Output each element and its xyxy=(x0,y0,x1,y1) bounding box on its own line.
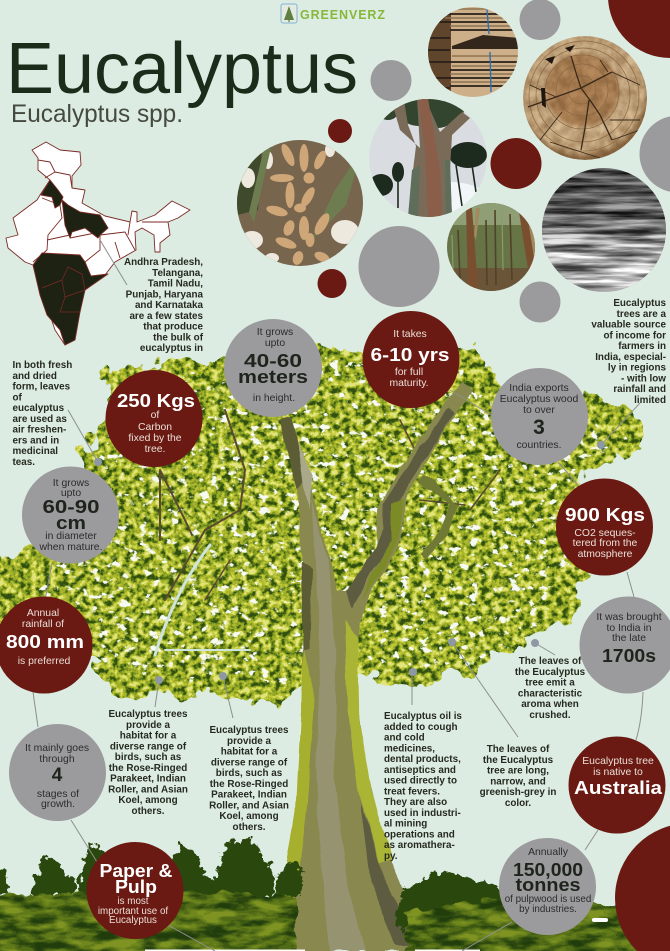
text: producing states: are a few states xyxy=(129,311,204,322)
stat: maturity xyxy=(362,311,460,408)
text: income source: limited xyxy=(634,395,666,406)
stat: diameter: 60-90 xyxy=(42,496,100,517)
text: income source: India, especial- xyxy=(595,352,666,363)
stat: height: in height. xyxy=(253,393,295,404)
background bushes xyxy=(0,838,505,930)
pale highlight upper trunk xyxy=(298,440,312,510)
green strip on right branch xyxy=(362,500,402,600)
stat: paper and pulp: Eucalyptus xyxy=(109,915,157,926)
text: bird habitat 1: birds, such as xyxy=(115,752,182,763)
text: bird habitat 1: the Rose-Ringed xyxy=(109,763,187,774)
stat: rainfall: Annual xyxy=(27,608,59,619)
stat: growth stages: It mainly goes xyxy=(25,743,89,754)
text: bird habitat 2: birds, such as xyxy=(216,768,283,779)
stat: paper and pulp xyxy=(86,842,184,939)
text: leaf shape: tree are long, xyxy=(487,766,549,776)
text: leaf aroma: characteristic xyxy=(518,688,583,699)
text: income source: valuable source xyxy=(591,320,666,330)
stat: rainfall: 800 mm xyxy=(6,632,84,652)
stat: growth stages: 4 xyxy=(52,765,63,786)
text: bird habitat 2: Eucalyptus trees xyxy=(209,725,289,736)
stat: diameter: when mature. xyxy=(39,542,102,553)
stat: exports: countries. xyxy=(516,440,562,451)
text: leaf aroma: the Eucalyptus xyxy=(515,667,586,678)
text: leaves used: of xyxy=(12,392,23,403)
stat: CO2: CO2 seques- xyxy=(574,528,636,539)
text: leaf shape: color. xyxy=(505,798,531,809)
text: bird habitat 2: Parakeet, Indian xyxy=(211,790,287,800)
text: leaves used: teas. xyxy=(12,457,35,468)
stat: brought to India: the late xyxy=(612,633,646,644)
text: leaves used: In both fresh xyxy=(12,360,72,371)
dark lower strip xyxy=(360,800,420,945)
stat: diameter: It grows xyxy=(53,478,89,489)
logo text: GREENVERZ xyxy=(300,8,385,22)
text: eucalyptus oil: medicines, xyxy=(384,743,435,754)
stat: pulpwood: by industries. xyxy=(519,904,577,915)
photo: bark texture xyxy=(540,165,670,295)
text: eucalyptus oil: and cold xyxy=(384,732,425,744)
text: bird habitat 1: habitat for a xyxy=(120,730,177,742)
bottom edge highlights xyxy=(145,918,608,951)
text: bird habitat 1: Eucalyptus trees xyxy=(108,709,188,720)
dark strip upper trunk xyxy=(278,415,312,650)
text: bird habitat 1: diverse range of xyxy=(110,741,187,752)
stat: native to Australia xyxy=(568,736,666,834)
text: leaf aroma: The leaves of xyxy=(519,656,582,667)
stat: height: meters xyxy=(238,366,308,387)
text: leaf aroma: aroma when xyxy=(521,699,579,710)
photo: wood cross section xyxy=(523,36,647,160)
stat: exports xyxy=(491,368,588,465)
stat: CO2: atmosphere xyxy=(578,549,633,560)
text: eucalyptus oil: al mining xyxy=(384,818,427,830)
stat: paper and pulp: important use of xyxy=(98,906,168,917)
gaps of sky in the foliage xyxy=(40,350,630,680)
stat: height: 40-60 xyxy=(244,350,302,371)
stat: growth stages: stages of xyxy=(37,789,79,800)
text: eucalyptus oil: operations and xyxy=(384,829,455,840)
text: bird habitat 2: provide a xyxy=(227,736,271,747)
text: leaves used: ers and in xyxy=(12,435,59,446)
stat: paper and pulp: Paper & xyxy=(100,860,172,881)
stat: maturity: maturity. xyxy=(389,378,429,389)
text: producing states: Punjab, Haryana xyxy=(126,289,203,300)
stat: diameter: cm xyxy=(56,512,86,533)
logo xyxy=(281,4,385,23)
text: leaves used: eucalyptus xyxy=(12,403,65,414)
stat: native to Australia: is native to xyxy=(593,767,643,778)
India outline xyxy=(6,142,190,345)
text: leaves used: are used as xyxy=(12,414,67,425)
text: eucalyptus oil: used directly to xyxy=(384,776,457,786)
stat: exports: India exports xyxy=(509,383,569,394)
text: producing states: Andhra Pradesh, xyxy=(124,257,203,268)
text: income source: - with low xyxy=(621,373,666,384)
inner dark state borders xyxy=(42,267,85,312)
text: bird habitat 2: habitat for a xyxy=(221,746,278,758)
text: leaves used: air freshen- xyxy=(12,424,66,436)
text: leaf aroma: crushed. xyxy=(529,710,571,721)
text: income source: Eucalyptus xyxy=(613,298,667,309)
stat: pulpwood: of pulpwood is used xyxy=(505,894,591,905)
text: bird habitat 2: diverse range of xyxy=(211,757,288,768)
text: bird habitat 1: provide a xyxy=(126,720,170,731)
producing states in dark xyxy=(33,180,108,345)
stat: rainfall xyxy=(0,596,92,694)
stat: paper and pulp: Pulp xyxy=(115,876,157,897)
text: income source: ly in regions xyxy=(608,362,667,374)
decorative circles xyxy=(318,0,670,322)
pale bark strip xyxy=(312,500,366,951)
text: leaf shape: narrow, and xyxy=(490,776,546,787)
stat: pulpwood: 150,000 xyxy=(513,859,583,880)
text: bird habitat 2: the Rose-Ringed xyxy=(210,779,288,790)
text: eucalyptus oil: antiseptics and xyxy=(384,765,456,776)
text: producing states: that produce xyxy=(143,322,203,332)
text: leaves used: medicinal xyxy=(12,446,58,457)
stat: growth stages xyxy=(9,724,106,821)
text: producing states: the bulk of xyxy=(153,332,204,343)
text: leaf aroma: tree emit a xyxy=(525,678,575,688)
text: producing states: Telangana, xyxy=(152,268,203,279)
logo mark xyxy=(281,4,297,23)
secondary branch xyxy=(418,474,458,560)
photo: eucalyptus flowers xyxy=(237,140,363,266)
stat: maturity: 6-10 yrs xyxy=(370,344,450,365)
stat: native to Australia: Australia xyxy=(574,777,663,798)
stat: carbon fixed: of xyxy=(151,410,159,421)
photo: rainbow eucalyptus trunk xyxy=(369,99,487,217)
stat: growth stages: growth. xyxy=(41,799,75,810)
stat: diameter: in diameter xyxy=(45,531,97,542)
text: bird habitat 1: Parakeet, Indian xyxy=(110,774,186,784)
corner circle xyxy=(615,823,670,951)
yellow bark strip left xyxy=(272,650,315,945)
text: bird habitat 2: others. xyxy=(233,822,266,833)
text: bird habitat 1: Roller, and Asian xyxy=(108,784,188,795)
trunk body xyxy=(230,382,472,951)
stat: carbon fixed: fixed by the xyxy=(128,433,182,444)
stat: rainfall: is preferred xyxy=(18,656,70,667)
text: eucalyptus oil: Eucalyptus oil is xyxy=(384,711,462,722)
photo: stacked timber xyxy=(428,7,518,97)
text: leaf shape: The leaves of xyxy=(487,744,550,755)
yellow bark strip right xyxy=(345,620,392,862)
text: leaves used: form, leaves xyxy=(12,382,71,392)
stat: carbon fixed xyxy=(106,370,202,467)
stat: exports: Eucalyptus wood xyxy=(500,394,578,405)
stat: CO2 xyxy=(556,478,653,576)
stat: carbon fixed: 250 Kgs xyxy=(117,390,195,411)
text: eucalyptus oil: py. xyxy=(384,851,398,862)
stat: height: It grows xyxy=(257,327,293,338)
tree trunk xyxy=(230,382,472,951)
stat: diameter: upto xyxy=(61,488,81,499)
text: leaves used: and dried xyxy=(12,371,57,382)
text: bird habitat 2: Roller, and Asian xyxy=(209,800,289,811)
text: bird habitat 2: Koel, among xyxy=(219,811,279,822)
connector lines xyxy=(33,390,643,951)
stat: maturity: for full xyxy=(395,367,423,378)
stat: CO2: 900 Kgs xyxy=(565,504,645,525)
stat: height xyxy=(224,319,322,417)
text: producing states: and Karnataka xyxy=(135,300,204,311)
text: income source: of income for xyxy=(603,330,666,341)
stat: CO2: tered from the xyxy=(573,538,638,549)
dark bark strip on right branch xyxy=(345,408,455,610)
text: income source: trees are a xyxy=(617,309,666,320)
text: leaf shape: the Eucalyptus xyxy=(483,755,554,766)
text: income source: farmers in xyxy=(618,341,666,352)
text: eucalyptus oil: dental products, xyxy=(384,754,461,765)
text: eucalyptus oil: used in industri- xyxy=(384,808,461,819)
stat: exports: 3 xyxy=(533,416,545,439)
title: Eucalyptus xyxy=(6,29,358,109)
stat: paper and pulp: is most xyxy=(117,896,149,907)
stat: brought to India xyxy=(580,596,670,694)
stat: native to Australia: Eucalyptus tree xyxy=(582,756,654,767)
tree branches xyxy=(155,410,500,655)
text: eucalyptus oil: as aromathera- xyxy=(384,840,455,851)
text: eucalyptus oil: They are also xyxy=(384,797,447,808)
text: eucalyptus oil: added to cough xyxy=(384,722,458,733)
stat: rainfall: rainfall of xyxy=(22,619,64,630)
stat: maturity: It takes xyxy=(393,329,427,340)
text: eucalyptus oil: treat fevers. xyxy=(384,786,440,797)
stat: brought to India: It was brought xyxy=(596,612,662,623)
photo: eucalyptus forest xyxy=(447,203,535,291)
text: leaf shape: greenish-grey in xyxy=(480,787,556,798)
text: producing states: Tamil Nadu, xyxy=(148,278,203,290)
leader dots xyxy=(94,441,605,684)
stat: brought to India: to India in xyxy=(606,623,652,634)
stat: brought to India: 1700s xyxy=(602,645,656,666)
tree canopy foliage xyxy=(0,332,640,705)
text: producing states: eucalyptus in xyxy=(140,343,203,354)
stat: pulpwood xyxy=(499,838,596,935)
state borders xyxy=(33,160,168,275)
stat: carbon fixed: tree. xyxy=(145,444,165,455)
text: bird habitat 1: others. xyxy=(132,806,165,817)
stat: exports: to over xyxy=(523,405,555,416)
root shadow xyxy=(230,925,290,951)
stat: pulpwood: tonnes xyxy=(516,874,580,895)
ground grass xyxy=(0,890,670,951)
stat: diameter xyxy=(22,466,119,564)
stat: growth stages: through xyxy=(39,754,75,765)
map leader line xyxy=(100,240,127,285)
text: bird habitat 1: Koel, among xyxy=(118,795,178,806)
stat: carbon fixed: Carbon xyxy=(138,422,172,433)
text: income source: rainfall and xyxy=(613,384,666,395)
stat: pulpwood: Annually xyxy=(528,847,569,858)
stat: height: upto xyxy=(265,338,285,349)
subtitle: Eucalyptus spp. xyxy=(11,100,183,128)
map of India xyxy=(6,142,190,345)
